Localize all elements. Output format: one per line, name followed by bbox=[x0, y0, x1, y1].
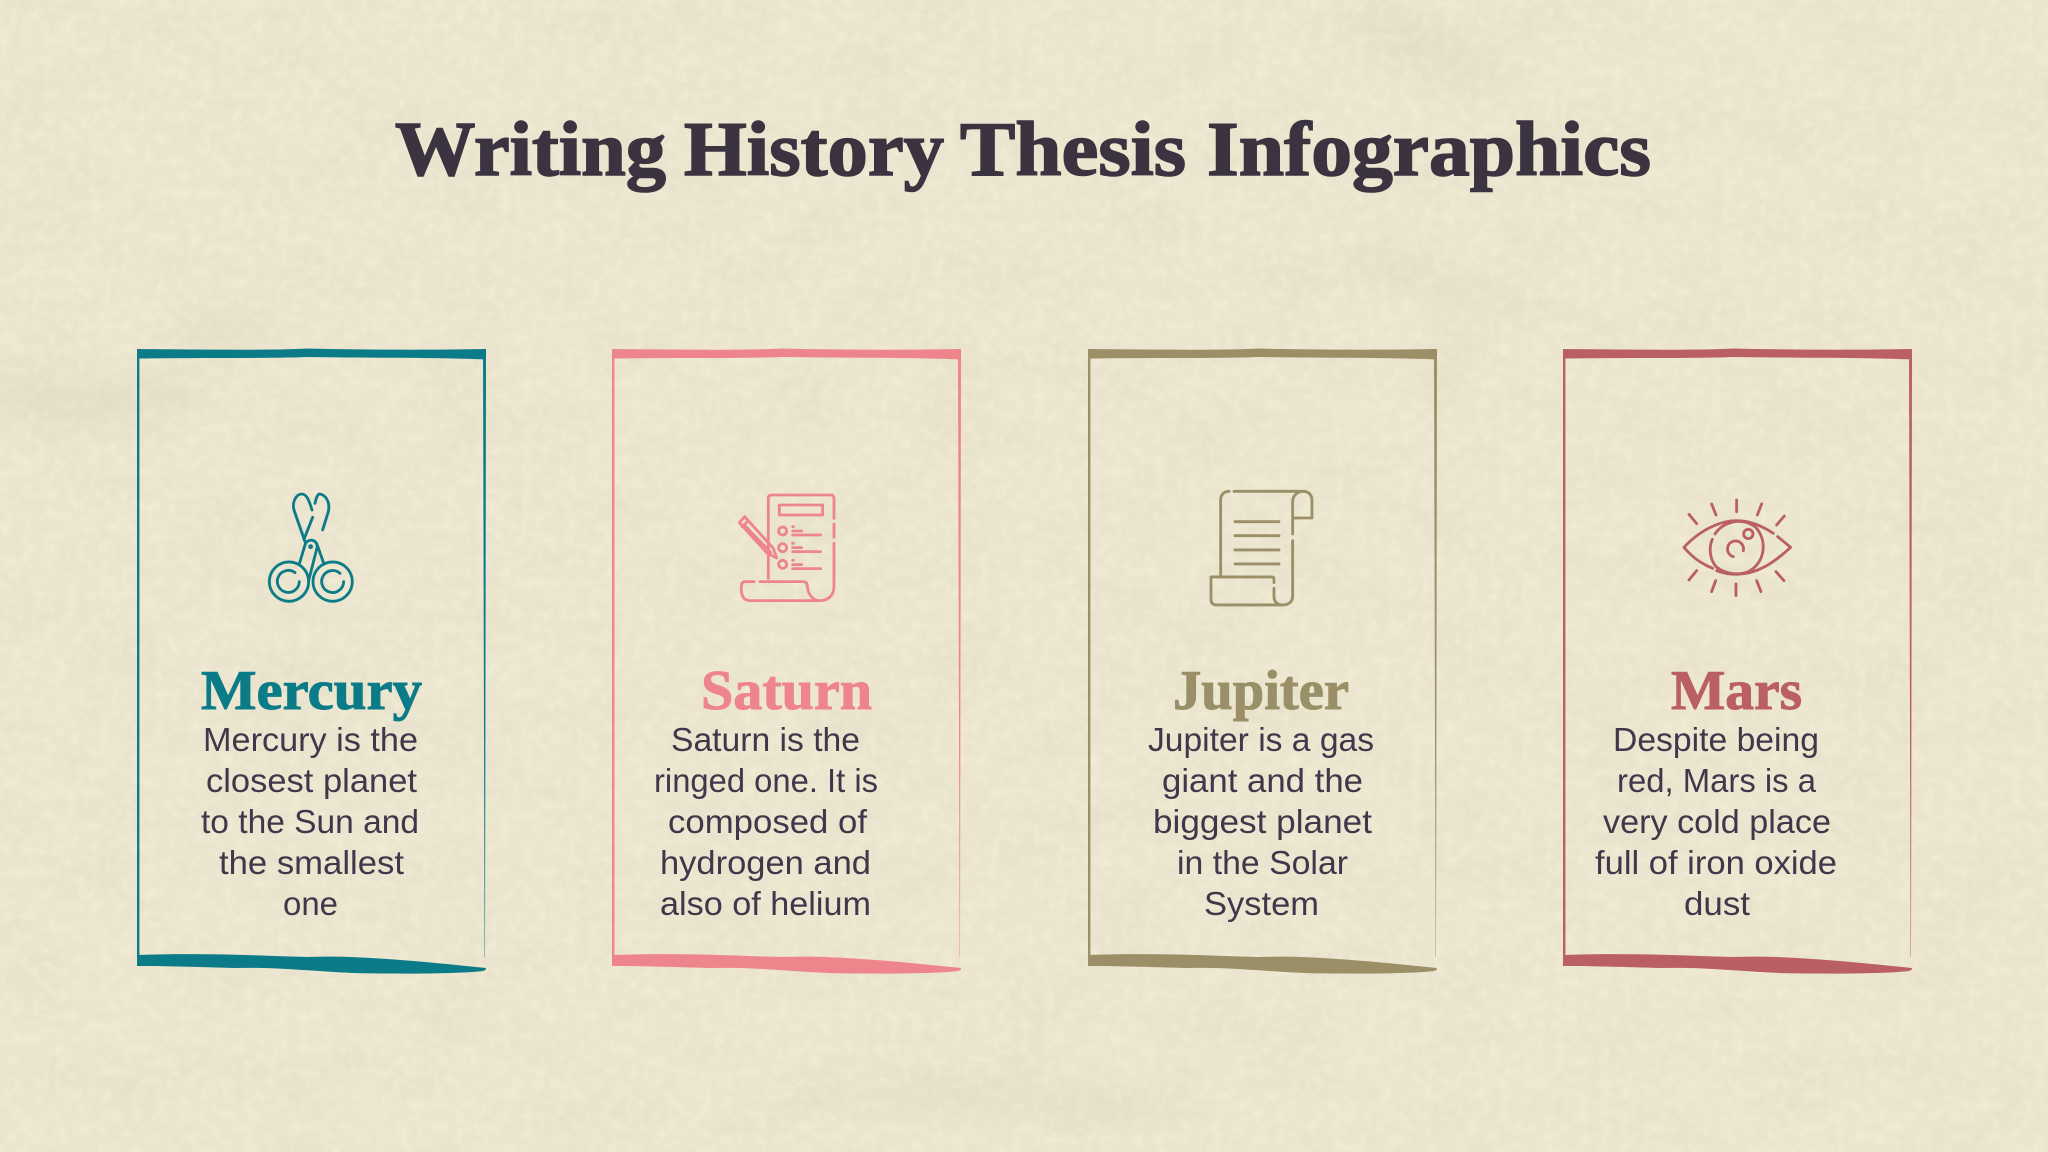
text: Mercury description: closest planet bbox=[206, 762, 417, 799]
title: Infographics bbox=[1207, 106, 1651, 192]
text: Jupiter description: giant and the bbox=[1162, 762, 1363, 799]
text: Mars description: Despite being bbox=[1613, 721, 1819, 758]
icon: scroll bbox=[1211, 491, 1312, 605]
text: Jupiter description: Jupiter is a gas bbox=[1148, 721, 1374, 758]
frame: Saturn bbox=[612, 348, 961, 974]
title bbox=[395, 106, 1651, 192]
text: Jupiter description: biggest planet bbox=[1153, 803, 1372, 840]
heading: Saturn: Saturn bbox=[701, 660, 872, 722]
text: Mars description: red, Mars is a bbox=[1617, 762, 1817, 799]
panel: Mars bbox=[1563, 348, 1912, 974]
icon: eye bbox=[1684, 500, 1791, 596]
frame: Mercury bbox=[137, 348, 486, 974]
heading: Jupiter: Jupiter bbox=[1173, 660, 1349, 722]
text: Jupiter description: in the Solar bbox=[1177, 844, 1348, 881]
heading: Mars: Mars bbox=[1671, 660, 1802, 722]
text: Saturn description: ringed one. It is bbox=[654, 762, 878, 799]
heading: Mercury: Mercury bbox=[201, 660, 422, 722]
text: Jupiter description: System bbox=[1204, 885, 1319, 922]
text: Saturn description: hydrogen and bbox=[660, 844, 871, 881]
text: Mars description: very cold place bbox=[1603, 803, 1831, 840]
panel: Mercury bbox=[137, 348, 486, 974]
text: Mercury description bbox=[201, 721, 419, 922]
text: Jupiter description bbox=[1148, 721, 1374, 922]
title: Writing bbox=[395, 106, 666, 192]
title: History bbox=[684, 106, 944, 192]
text: Mars description bbox=[1595, 721, 1837, 922]
text: Mercury description: to the Sun and bbox=[201, 803, 419, 840]
icon: checklist and pencil bbox=[739, 495, 834, 601]
text: Mars description: dust bbox=[1684, 885, 1750, 922]
text: Mercury description: the smallest bbox=[219, 844, 404, 881]
text: Saturn description: also of helium bbox=[660, 885, 871, 922]
frame: Jupiter bbox=[1088, 348, 1437, 974]
text: Mars description: full of iron oxide bbox=[1595, 844, 1837, 881]
frame: Mars bbox=[1563, 348, 1912, 974]
panel: Saturn bbox=[612, 348, 961, 974]
text: Saturn description: composed of bbox=[668, 803, 868, 840]
text: Mercury description: one bbox=[283, 885, 338, 922]
title: Thesis bbox=[960, 106, 1186, 192]
text: Saturn description: Saturn is the bbox=[671, 721, 860, 758]
text: Mercury description: Mercury is the bbox=[203, 721, 418, 758]
text: Saturn description bbox=[654, 721, 878, 922]
icon: scissors bbox=[269, 494, 352, 601]
panel: Jupiter bbox=[1088, 348, 1437, 974]
